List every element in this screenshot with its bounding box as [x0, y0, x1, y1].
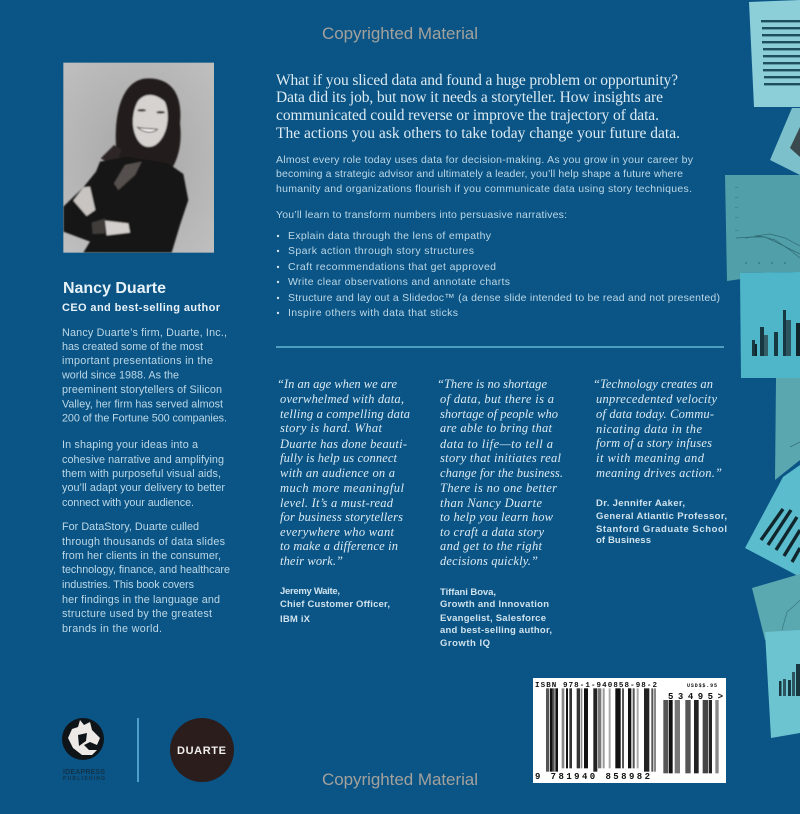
list lead-in: You’ll learn to transform numbers into persuasive narratives: — [276, 209, 567, 221]
intro statement — [276, 72, 680, 142]
bullet list: Explain data through the lens of empathy — [288, 230, 492, 242]
intro statement: The actions you ask others to take today change your future data. — [276, 125, 680, 142]
quote: Tiffani Bova — [437, 377, 563, 649]
quote: Tiffani Bova: Growth IQ — [440, 638, 490, 649]
author bio: important presentations in the — [62, 355, 213, 367]
sheet: teal rear chart — [775, 378, 800, 480]
supporting paragraph: Almost every role today uses data for decision-making. As you grow in your career by — [276, 154, 694, 166]
watermark: bottom: Copyrighted Material — [322, 770, 478, 789]
quote: Jeremy Waite: everywhere who want — [280, 525, 395, 539]
quote: Tiffani Bova: story that initiates real — [440, 451, 562, 465]
bullet list: Spark action through story structures — [288, 245, 474, 257]
author bio: brands in the world. — [62, 623, 162, 635]
quote: Jeremy Waite — [277, 377, 410, 625]
supporting paragraph: becoming a strategic advisor and ultimately a leader, you’ll help shape a future where — [276, 168, 683, 180]
quote: Jeremy Waite: for business storytellers — [280, 510, 403, 524]
bullet list: Write clear observations and annotate charts — [288, 276, 510, 288]
quote: Tiffani Bova: decisions quickly.” — [440, 554, 538, 568]
quote: Jennifer Aaker: of data today. Commu- — [596, 407, 714, 421]
barcode: main digits: 9 781940 858982 — [535, 772, 650, 782]
quote: Jeremy Waite: to make a difference in — [280, 539, 398, 553]
quote: Jeremy Waite: IBM iX — [280, 614, 311, 625]
decorative chart sheets strip — [725, 0, 800, 738]
quote: Jennifer Aaker: meaning drives action.” — [596, 466, 722, 480]
quote: Tiffani Bova: data to life—to tell a — [440, 437, 553, 451]
quote: Jeremy Waite: telling a compelling data — [280, 407, 410, 421]
supporting paragraph: humanity and organizations flourish if you communicate data using story techniques. — [276, 183, 692, 195]
quote: Tiffani Bova: are able to bring that — [440, 421, 553, 435]
barcode: price code: USD$$.95 — [687, 683, 717, 689]
author bio: from her clients in the consumer, — [62, 550, 221, 562]
quote: Tiffani Bova: Evangelist, Salesforce — [440, 613, 546, 624]
barcode: add-on digits: 53495> — [668, 692, 723, 702]
sheet: tilted dark bars — [745, 465, 800, 577]
quote: Tiffani Bova: Tiffani Bova, — [440, 587, 496, 598]
quote: Jeremy Waite: Jeremy Waite, — [280, 586, 340, 597]
quote: Tiffani Bova: Growth and Innovation — [440, 599, 549, 610]
quote: Tiffani Bova: and best-selling author, — [440, 625, 552, 636]
author bio: technology, finance, and healthcare — [62, 564, 230, 576]
author bio: Valley, her firm has served almost — [62, 398, 223, 410]
quote: Tiffani Bova: than Nancy Duarte — [440, 496, 542, 510]
author bio: you’ll adapt your delivery to better — [62, 482, 225, 494]
quote: Jennifer Aaker: Dr. Jennifer Aaker, — [596, 498, 685, 509]
logo: Ideapress wordmark: PUBLISHING — [63, 776, 105, 782]
quote: Jennifer Aaker: of Business — [596, 535, 651, 546]
author bio: In shaping your ideas into a — [62, 439, 198, 451]
author title: CEO and best-selling author — [62, 302, 221, 314]
quote: Jeremy Waite: overwhelmed with data, — [280, 392, 404, 406]
quote: Tiffani Bova: change for the business. — [440, 466, 563, 480]
quote: Jennifer Aaker: form of a story infuses — [596, 436, 712, 450]
author bio: through thousands of data slides — [62, 536, 226, 548]
author bio: industries. This book covers — [62, 579, 195, 591]
author bio — [61, 327, 230, 635]
logo: Ideapress dragon — [62, 718, 105, 782]
author bio: Nancy Duarte’s firm, Duarte, Inc., — [62, 327, 227, 339]
bullet list: Craft recommendations that get approved — [288, 261, 496, 273]
quote: Jennifer Aaker: it with meaning and — [596, 451, 705, 465]
quote: Tiffani Bova: of data, but there is a — [440, 392, 554, 406]
sheet: line chart — [725, 175, 800, 281]
sheet: horizontal bars — [749, 0, 800, 107]
intro statement: What if you sliced data and found a huge problem or opportunity? — [276, 72, 678, 89]
quote: Tiffani Bova: to craft a data story — [440, 525, 544, 539]
quote: Jennifer Aaker: “Technology creates an — [593, 377, 713, 391]
sheet: column chart — [740, 272, 800, 378]
quote: Jennifer Aaker: unprecedented velocity — [596, 392, 717, 406]
bullet list: Inspire others with data that sticks — [288, 307, 458, 319]
quote: Jeremy Waite: with an audience on a — [280, 466, 395, 480]
quote: Jeremy Waite: “In an age when we are — [277, 377, 397, 391]
author bio: world since 1988. As the — [61, 370, 179, 382]
sheet: tilted dark image — [770, 108, 800, 175]
sheet: lower column chart — [765, 630, 800, 738]
author photo — [63, 63, 214, 253]
supporting paragraph — [276, 154, 694, 195]
quote: Jennifer Aaker: Stanford Graduate School — [596, 524, 727, 535]
logo: Ideapress wordmark: IDEAPRESS — [63, 769, 105, 776]
barcode — [533, 678, 726, 783]
logo: Duarte: DUARTE — [177, 745, 226, 757]
sheet: teal line chart — [752, 574, 800, 640]
logo: Ideapress wordmark — [63, 769, 105, 782]
intro statement: communicated could reverse or improve the trajectory of data. — [276, 107, 659, 124]
author bio: cohesive narrative and amplifying — [62, 454, 224, 466]
author name: Nancy Duarte — [63, 280, 166, 297]
author bio: has created some of the most — [62, 341, 203, 353]
author bio: connect with your audience. — [62, 497, 194, 509]
quote: Tiffani Bova: to help you learn how — [440, 510, 554, 524]
quote: Jennifer Aaker: General Atlantic Professor, — [596, 511, 727, 522]
intro statement: Data did its job, but now it needs a storyteller. How insights are — [276, 89, 663, 106]
author bio: preeminent storytellers of Silicon — [62, 384, 222, 396]
quote: Jennifer Aaker: nicating data in the — [596, 422, 702, 436]
quote: Jeremy Waite: fully is help us connect — [280, 451, 398, 465]
quote: Jennifer Aaker — [593, 377, 727, 546]
quote: Jeremy Waite: much more meaningful — [280, 481, 405, 495]
quote: Jeremy Waite: story is hard. What — [280, 421, 383, 435]
logo: Duarte — [170, 718, 234, 782]
quote: Jeremy Waite: their work.” — [280, 554, 343, 568]
quote: Tiffani Bova: shortage of people who — [440, 407, 558, 421]
watermark: top: Copyrighted Material — [322, 24, 478, 43]
author bio: them with purposeful visual aids, — [62, 468, 221, 480]
bullet list: Structure and lay out a Slidedoc™ (a dense slide intended to be read and not presented) — [288, 292, 720, 304]
barcode: ISBN: ISBN 978-1-940858-98-2 — [535, 682, 657, 690]
author bio: 200 of the Fortune 500 companies. — [62, 412, 227, 424]
author bio: structure used by the greatest — [62, 608, 212, 620]
bullet list — [277, 230, 720, 319]
quote: Tiffani Bova: and get to the right — [440, 539, 543, 553]
quote: Jeremy Waite: Duarte has done beauti- — [279, 437, 407, 451]
quote: Jeremy Waite: level. It’s a must-read — [280, 496, 394, 510]
quote: Tiffani Bova: There is no one better — [440, 481, 557, 495]
quote: Jeremy Waite: Chief Customer Officer, — [280, 599, 390, 610]
author bio: For DataStory, Duarte culled — [62, 521, 199, 533]
author bio: her findings in the language and — [62, 594, 220, 606]
quote: Tiffani Bova: “There is no shortage — [437, 377, 547, 391]
